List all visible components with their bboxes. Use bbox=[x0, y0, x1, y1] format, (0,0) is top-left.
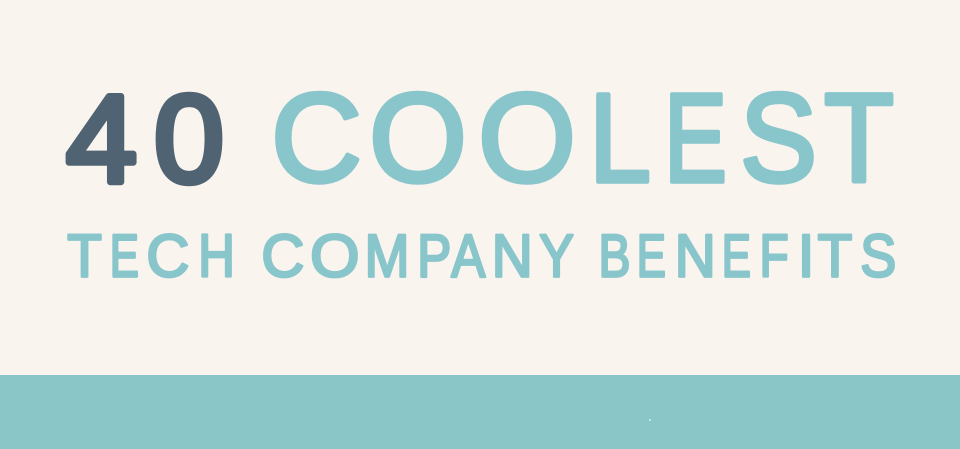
title: number 40: 0 bbox=[154, 71, 224, 209]
subtitle: word BENEFITS: I bbox=[798, 223, 814, 290]
title: word COOLEST: T bbox=[824, 68, 894, 209]
subtitle: word BENEFITS: S bbox=[860, 223, 896, 290]
subtitle: word COMPANY: N bbox=[492, 223, 533, 290]
subtitle: word BENEFITS: T bbox=[818, 223, 852, 290]
subtitle: word BENEFITS: F bbox=[760, 223, 789, 290]
subtitle: word COMPANY: M bbox=[365, 223, 409, 290]
title: word COOLEST: O bbox=[369, 68, 467, 209]
subtitle: word BENEFITS: B bbox=[598, 223, 630, 290]
title: word COOLEST: E bbox=[664, 68, 727, 209]
subtitle: word TECH: T bbox=[67, 223, 102, 290]
title: word COOLEST: L bbox=[589, 68, 651, 209]
teal footer band bbox=[0, 375, 960, 449]
subtitle: word COMPANY: Y bbox=[539, 223, 574, 290]
title: number 40: 4 bbox=[66, 71, 137, 209]
title: word COOLEST: C bbox=[271, 68, 362, 209]
subtitle: word BENEFITS: N bbox=[675, 223, 716, 290]
subtitle: word TECH: E bbox=[110, 223, 139, 290]
title: word COOLEST: O bbox=[478, 68, 576, 209]
subtitle: word COMPANY: C bbox=[261, 223, 304, 290]
subtitle: word BENEFITS: E bbox=[637, 223, 666, 290]
title: word COOLEST: S bbox=[740, 68, 817, 209]
subtitle: word TECH: H bbox=[198, 223, 235, 290]
subtitle: word COMPANY: P bbox=[417, 223, 451, 290]
subtitle: word COMPANY: A bbox=[451, 223, 485, 290]
subtitle: word BENEFITS: E bbox=[722, 223, 751, 290]
subtitle: word TECH: C bbox=[146, 223, 189, 290]
subtitle: word COMPANY: O bbox=[310, 223, 360, 290]
